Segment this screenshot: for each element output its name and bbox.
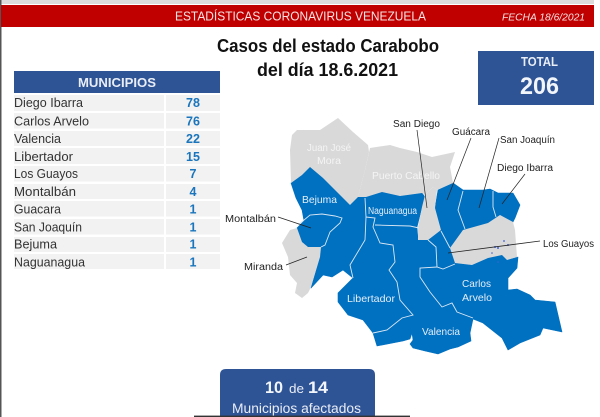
callout: Guácara	[447, 127, 490, 200]
callout: Los Guayos: Los Guayos	[543, 239, 594, 250]
row: Guacara	[14, 201, 220, 216]
map label: Mora: Mora	[317, 156, 341, 167]
row: Guacara: 1	[190, 202, 197, 216]
map: Miranda (grey)	[282, 228, 321, 298]
callout: Miranda: Miranda	[244, 262, 283, 273]
map label: Puerto Cabello: Puerto Cabello	[372, 171, 440, 182]
row: Los Guayos	[14, 166, 220, 182]
row: Carlos Arvelo: Carlos Arvelo	[14, 114, 89, 128]
row: Bejuma: Bejuma	[14, 238, 57, 252]
title: Casos del estado Carabobo	[217, 36, 439, 56]
table header: MUNICIPIOS	[78, 76, 156, 90]
row: Naguanagua: Naguanagua	[14, 256, 85, 270]
row: Diego Ibarra: Diego Ibarra	[14, 96, 83, 110]
callout: Miranda	[244, 257, 307, 273]
callout: San Joaquín	[479, 135, 555, 208]
map label: Valencia: Valencia	[422, 326, 460, 338]
row: Diego Ibarra: 78	[186, 96, 200, 110]
row: San Joaquín: San Joaquín	[14, 220, 82, 234]
map: Juan José Mora (grey)	[290, 118, 369, 205]
map: internal borders	[298, 191, 496, 333]
table header	[14, 71, 220, 93]
map: affected municipalities (blue)	[291, 167, 562, 354]
total box: 206	[520, 73, 559, 100]
row: Valencia: Valencia	[14, 132, 61, 146]
header bar	[1, 5, 594, 27]
affected municipalities box: 10	[265, 379, 283, 397]
map: Los Guayos area (grey)	[450, 215, 517, 265]
map label: Libertador: Libertador	[347, 293, 396, 305]
total box: TOTAL	[521, 54, 558, 69]
row: Bejuma	[14, 237, 220, 252]
row: Los Guayos: Los Guayos	[14, 167, 78, 181]
row: Valencia	[14, 131, 220, 146]
row: Naguanagua	[14, 254, 220, 270]
map label: Juan José Mora: Juan José	[307, 143, 351, 154]
row: San Joaquín	[14, 219, 220, 234]
callout: Los Guayos	[448, 239, 594, 253]
row: San Joaquín: 1	[190, 220, 197, 234]
row: Bejuma: 1	[190, 238, 197, 252]
callout: Guácara: Guácara	[452, 127, 490, 138]
row: Naguanagua: 1	[190, 256, 197, 270]
row: Montalbán: Montalbán	[14, 185, 76, 199]
affected municipalities box	[220, 369, 375, 417]
row: Valencia: 22	[186, 132, 200, 146]
table: municipios	[14, 71, 220, 270]
map label: Bejuma: Bejuma	[302, 194, 337, 206]
affected municipalities box: Municipios afectados	[232, 401, 361, 416]
header bar: ESTADÍSTICAS CORONAVIRUS VENEZUELA	[175, 8, 427, 24]
map: Puerto Cabello (grey)	[358, 145, 455, 197]
total box	[478, 51, 594, 105]
callout: San Joaquín: San Joaquín	[500, 135, 555, 146]
row: Guacara: Guacara	[14, 202, 61, 216]
header bar: FECHA 18/6/2021	[502, 13, 585, 24]
map of Carabobo	[225, 118, 594, 354]
map label: Naguanagua: Naguanagua	[368, 206, 417, 217]
map label: Arvelo: Arvelo	[462, 292, 492, 304]
row: Carlos Arvelo: 76	[186, 114, 200, 128]
row: Los Guayos: 7	[190, 167, 197, 181]
affected municipalities box: 14	[308, 379, 329, 397]
row: Libertador: 15	[186, 150, 200, 164]
affected municipalities box: de	[289, 381, 304, 396]
callout: Diego Ibarra	[497, 163, 553, 204]
map: Los Guayos dots	[491, 240, 509, 263]
callout: Diego Ibarra: Diego Ibarra	[497, 163, 553, 174]
row: Carlos Arvelo	[14, 113, 220, 128]
callout: San Diego: San Diego	[393, 119, 440, 130]
title	[217, 36, 439, 80]
row: Montalbán	[14, 184, 220, 199]
map label: Carlos: Carlos	[462, 278, 491, 290]
map: San Diego (grey)	[418, 187, 441, 240]
row: Montalbán: 4	[190, 185, 197, 199]
row: Libertador: Libertador	[14, 150, 73, 164]
title: del día 18.6.2021	[257, 60, 398, 80]
callout: Montalbán	[225, 214, 311, 228]
row: Diego Ibarra	[14, 95, 220, 111]
callout: Montalbán: Montalbán	[225, 214, 276, 225]
callout: San Diego	[393, 119, 440, 208]
row: Libertador	[14, 148, 220, 164]
